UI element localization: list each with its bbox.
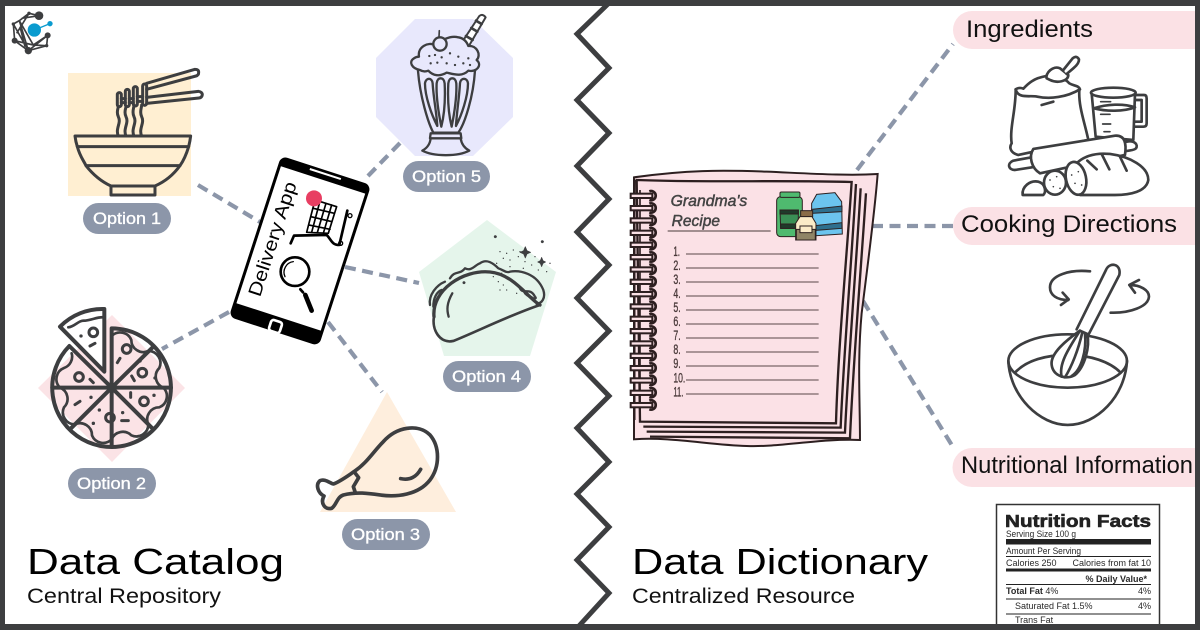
- tag: cooking directions: Cooking Directions: [961, 211, 1177, 238]
- nutrition facts label: [996, 504, 1160, 630]
- recipe list: 7.: [673, 327, 681, 343]
- recipe list: 9.: [673, 355, 681, 371]
- icon: whisk and bowl: [1008, 265, 1149, 425]
- phone: delivery app: [229, 156, 371, 346]
- tag: ingredients: Ingredients: [966, 16, 1093, 43]
- label: option 5: [403, 161, 490, 192]
- spiral binding: [631, 191, 656, 410]
- icon: pantry jars: [777, 192, 842, 240]
- recipe list: 10.: [673, 369, 685, 385]
- nutrition facts label: Calories 250: [1006, 558, 1057, 568]
- icon: magnifying glass: [281, 257, 312, 311]
- nutrition facts label: 4%: [1138, 586, 1151, 596]
- connector lines: data dictionary: [857, 44, 955, 447]
- nutrition facts label: 4%: [1138, 601, 1151, 611]
- recipe list: 6.: [673, 313, 681, 329]
- icon: milkshake: [376, 15, 513, 156]
- recipe list: 4.: [673, 285, 681, 301]
- label: option 1: Option 1: [93, 209, 161, 228]
- label: option 2: [68, 468, 156, 499]
- title: data catalog: Central Repository: [27, 585, 222, 608]
- icon: pizza: [38, 309, 185, 462]
- nutrition facts label: Calories from fat 10: [1072, 558, 1151, 568]
- tag: nutritional information: Nutritional Information: [961, 452, 1193, 479]
- recipe list: 1.: [673, 243, 680, 259]
- recipe list: 11.: [673, 383, 683, 399]
- nutrition facts label: Amount Per Serving: [1006, 546, 1081, 556]
- logo: [12, 11, 53, 54]
- nutrition facts label: % Daily Value*: [1085, 574, 1147, 584]
- nutrition facts label: Nutrition Facts: [1005, 511, 1151, 531]
- recipe heading: Recipe: [672, 213, 720, 230]
- recipe list: 2.: [673, 257, 681, 273]
- recipe list: [673, 243, 819, 399]
- title: data dictionary: Centralized Resource: [632, 585, 855, 608]
- notification dot: [306, 190, 322, 206]
- label: option 1: [83, 203, 171, 234]
- label: option 4: Option 4: [452, 367, 521, 386]
- icon: shopping cart: [291, 200, 352, 245]
- recipe notebook: [631, 171, 878, 446]
- connector lines: data catalog: [162, 143, 419, 392]
- title: data catalog: [27, 541, 284, 608]
- tag: ingredients: [953, 11, 1195, 49]
- recipe list: 8.: [673, 341, 681, 357]
- label: option 2: Option 2: [77, 474, 146, 493]
- title: data dictionary: [632, 541, 928, 608]
- label: option 5: Option 5: [412, 167, 481, 186]
- recipe list: 5.: [673, 299, 681, 315]
- label: option 4: [443, 361, 531, 392]
- zigzag divider: [577, 3, 609, 627]
- phone text: Delivery App: [244, 179, 301, 299]
- icon: noodle bowl: [68, 69, 202, 196]
- recipe heading: [671, 193, 747, 230]
- nutrition facts label: Saturated Fat 1.5%: [1015, 601, 1093, 611]
- title: data catalog: Data Catalog: [27, 541, 284, 582]
- icon: baking ingredients: [1009, 57, 1148, 197]
- recipe list: 3.: [673, 271, 681, 287]
- tag: cooking directions: [953, 207, 1195, 245]
- icon: chicken drumstick: [318, 392, 456, 512]
- nutrition facts label: Serving Size 100 g: [1006, 529, 1076, 539]
- title: data dictionary: Data Dictionary: [632, 541, 928, 582]
- label: option 3: [342, 519, 430, 550]
- nutrition facts label: Total Fat 4%: [1006, 586, 1058, 596]
- label: option 3: Option 3: [351, 525, 420, 544]
- icon: taco: [419, 220, 556, 356]
- tag: nutritional information: [952, 448, 1195, 487]
- nutrition facts label: Trans Fat: [1015, 615, 1054, 625]
- recipe heading: Grandma's: [671, 193, 747, 210]
